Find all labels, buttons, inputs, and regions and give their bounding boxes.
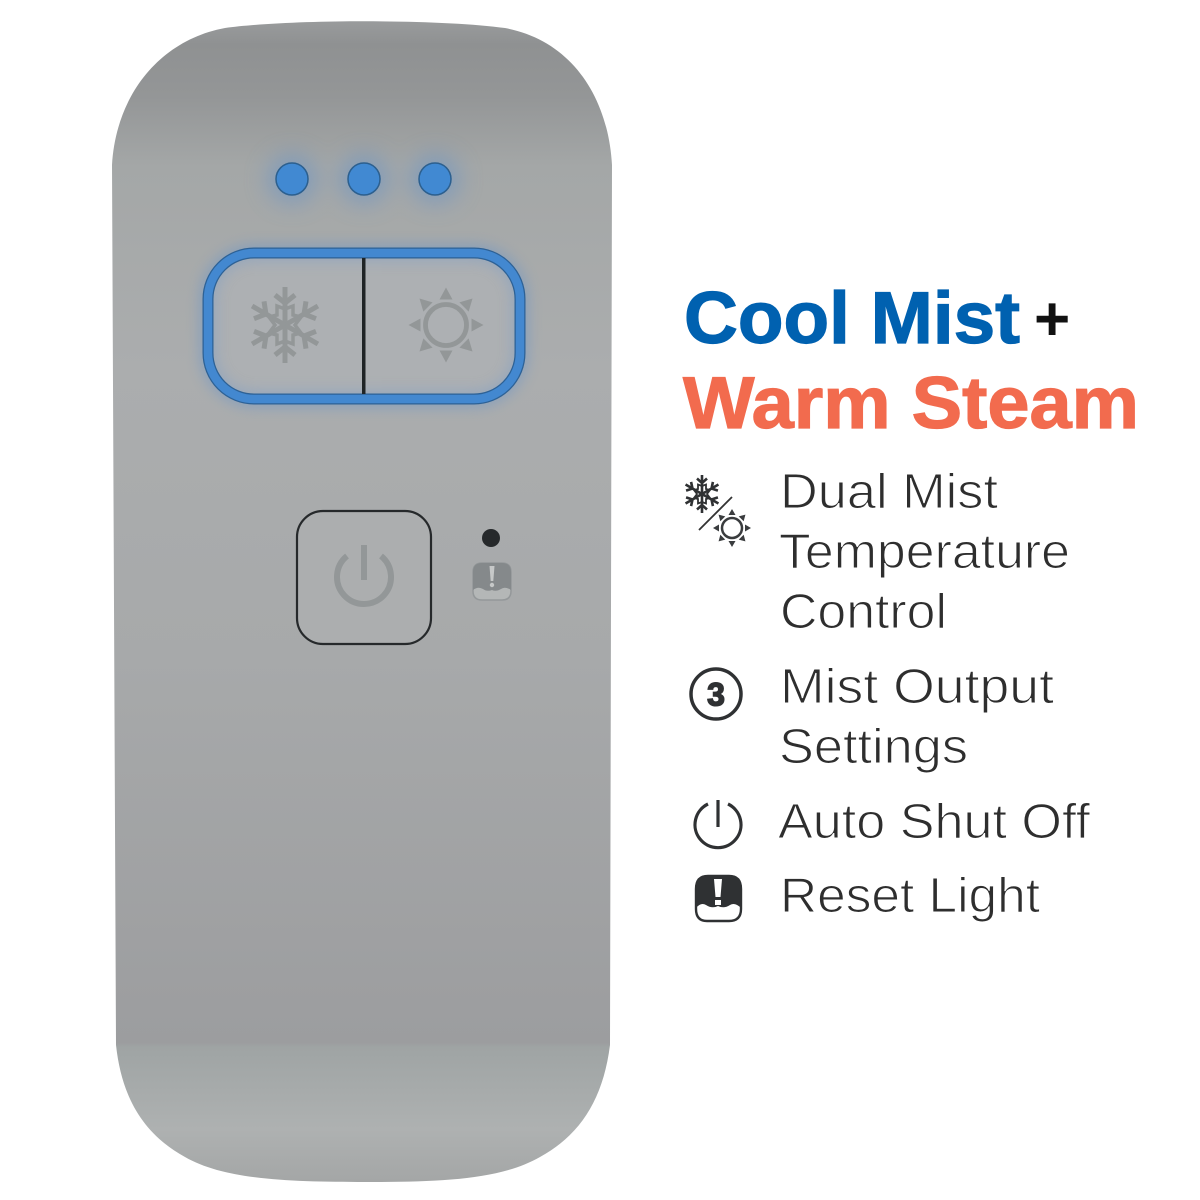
- text: Mist Output Settings: Mist Output: [780, 660, 1054, 714]
- reset indicator dot: [482, 529, 500, 547]
- icon: three settings: 3: [707, 676, 725, 712]
- icon: reset light: [696, 876, 741, 921]
- heading: Cool Mist +: Cool Mist: [684, 278, 1020, 359]
- text: Dual Mist Temperature Control: [779, 465, 1070, 639]
- text: Dual Mist Temperature Control: Dual Mist: [780, 465, 998, 519]
- icon: reset light on device: [473, 563, 511, 600]
- device body: [112, 21, 612, 1182]
- power button: [297, 511, 431, 644]
- icon: power button symbol: [337, 545, 391, 604]
- text: Mist Output Settings: Settings: [779, 720, 968, 774]
- icon: three settings: [691, 669, 741, 719]
- icon: snowflake and sun: [683, 475, 751, 547]
- text: Auto Shut Off: Auto Shut Off: [778, 795, 1090, 849]
- indicator lights: [268, 155, 459, 203]
- icon: power: [695, 800, 741, 848]
- text: Dual Mist Temperature Control: Temperature: [779, 525, 1070, 579]
- icon: sun button: [408, 288, 484, 362]
- button divider: [362, 258, 366, 394]
- text: Mist Output Settings: [779, 660, 1054, 774]
- text: Reset Light: Reset Light: [780, 869, 1040, 923]
- heading: Warm Steam: Warm Steam: [683, 363, 1139, 444]
- mode button pair: [208, 253, 520, 399]
- icon: snowflake button: [247, 287, 323, 363]
- heading: Cool Mist +: +: [1034, 285, 1070, 354]
- text: Dual Mist Temperature Control: Control: [780, 585, 947, 639]
